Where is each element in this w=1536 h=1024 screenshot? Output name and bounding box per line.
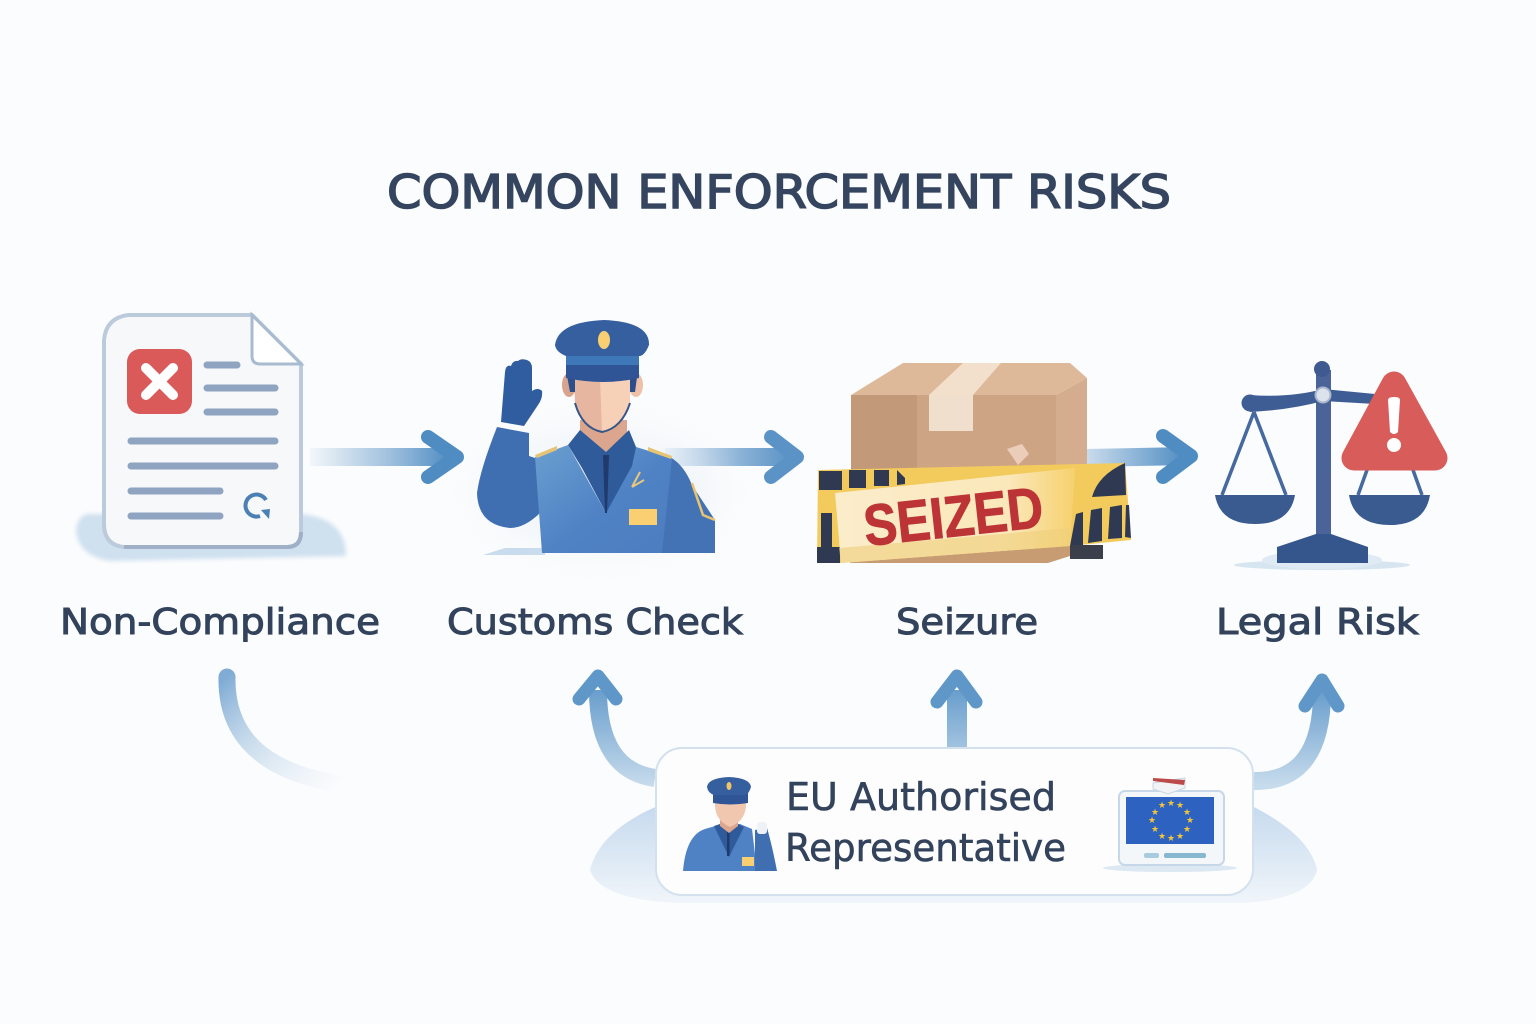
ground shadow: [1234, 560, 1410, 570]
epaulettes: [535, 446, 672, 459]
glove: [501, 359, 542, 426]
flag stars: ★: [1183, 808, 1191, 818]
sleeve stripe: [692, 483, 715, 520]
flag stars: ★: [1183, 825, 1191, 835]
seized plate: [835, 468, 1075, 563]
name tag: [629, 509, 657, 525]
card lines: [1144, 853, 1159, 858]
refresh symbol: [246, 495, 270, 519]
arrow: seizure to legal risk: [1085, 436, 1191, 477]
icon: scales with warning: [1215, 361, 1435, 570]
flag stars: ★: [1148, 816, 1156, 826]
box damage mark: [1007, 444, 1029, 465]
flag stars: ★: [1158, 832, 1166, 842]
label: non-compliance: Non-Compliance: [60, 602, 380, 643]
mini officer: [683, 777, 777, 871]
folded corner: [252, 315, 301, 364]
document shadow base: [76, 514, 346, 561]
warning triangle: [1354, 384, 1435, 458]
icon: seized parcel: [817, 363, 1131, 563]
beam: [1250, 389, 1375, 412]
icon: customs officer: [477, 320, 720, 555]
right sleeve: [660, 457, 715, 553]
EU flag: [1126, 797, 1214, 844]
arrow: fading curve from non-compliance: [227, 677, 365, 787]
text lines: [131, 365, 275, 516]
arrow: representative to legal risk: [1254, 680, 1338, 781]
box front: [851, 395, 1056, 485]
document sheet: [104, 315, 301, 547]
vest: [535, 445, 672, 553]
title: COMMON ENFORCEMENT RISKS: [387, 165, 1171, 219]
flag stars: ★: [1186, 816, 1194, 826]
icon: non-compliant document: [76, 315, 346, 561]
face: [574, 378, 630, 432]
label: legal risk: Legal Risk: [1216, 602, 1419, 643]
label: seizure: Seizure: [896, 602, 1038, 643]
cap: [555, 320, 649, 382]
arrow: representative to seizure: [937, 676, 976, 750]
seized text: SEIZED: [860, 475, 1046, 559]
hair: [566, 370, 638, 392]
pillar: [1316, 370, 1331, 540]
left pan: [1215, 495, 1295, 524]
flag stars: ★: [1151, 808, 1159, 818]
box top: [851, 363, 1087, 395]
panel text line 1: EU Authorised: [786, 775, 1056, 819]
ground shadow: [483, 548, 545, 555]
shirt and collar: [568, 430, 636, 513]
left strings: [1222, 412, 1286, 495]
panel text line 2: Representative: [785, 826, 1066, 870]
right strings: [1358, 470, 1422, 495]
EU flag card: [1103, 778, 1237, 872]
panel card: [656, 748, 1253, 895]
flag stars: ★: [1176, 801, 1184, 811]
red error badge: [127, 349, 192, 414]
raised sleeve: [477, 427, 541, 528]
arrow: document to customs: [310, 437, 457, 477]
representative panel base: [590, 805, 1317, 903]
base: [1277, 534, 1368, 563]
chest pin: [632, 472, 644, 487]
flag stars: ★: [1176, 832, 1184, 842]
flag stars: ★: [1151, 825, 1159, 835]
flag stars: ★: [1158, 801, 1166, 811]
flag stars: ★: [1167, 834, 1175, 844]
label: customs check: Customs Check: [447, 602, 743, 643]
flag stars: [1148, 799, 1194, 844]
flag stars: ★: [1167, 799, 1175, 809]
soft glow: [480, 430, 720, 550]
box lower: [850, 545, 1070, 563]
arrow: representative to customs check: [579, 676, 655, 778]
hazard tape: [817, 463, 1131, 563]
packing tape: [929, 363, 1001, 395]
arrow: customs to seizure: [665, 437, 797, 477]
neck: [580, 420, 627, 454]
panel: EU authorised representative: [656, 748, 1253, 895]
ears: [562, 373, 576, 397]
box side: [1056, 378, 1087, 480]
right pan: [1349, 495, 1430, 525]
